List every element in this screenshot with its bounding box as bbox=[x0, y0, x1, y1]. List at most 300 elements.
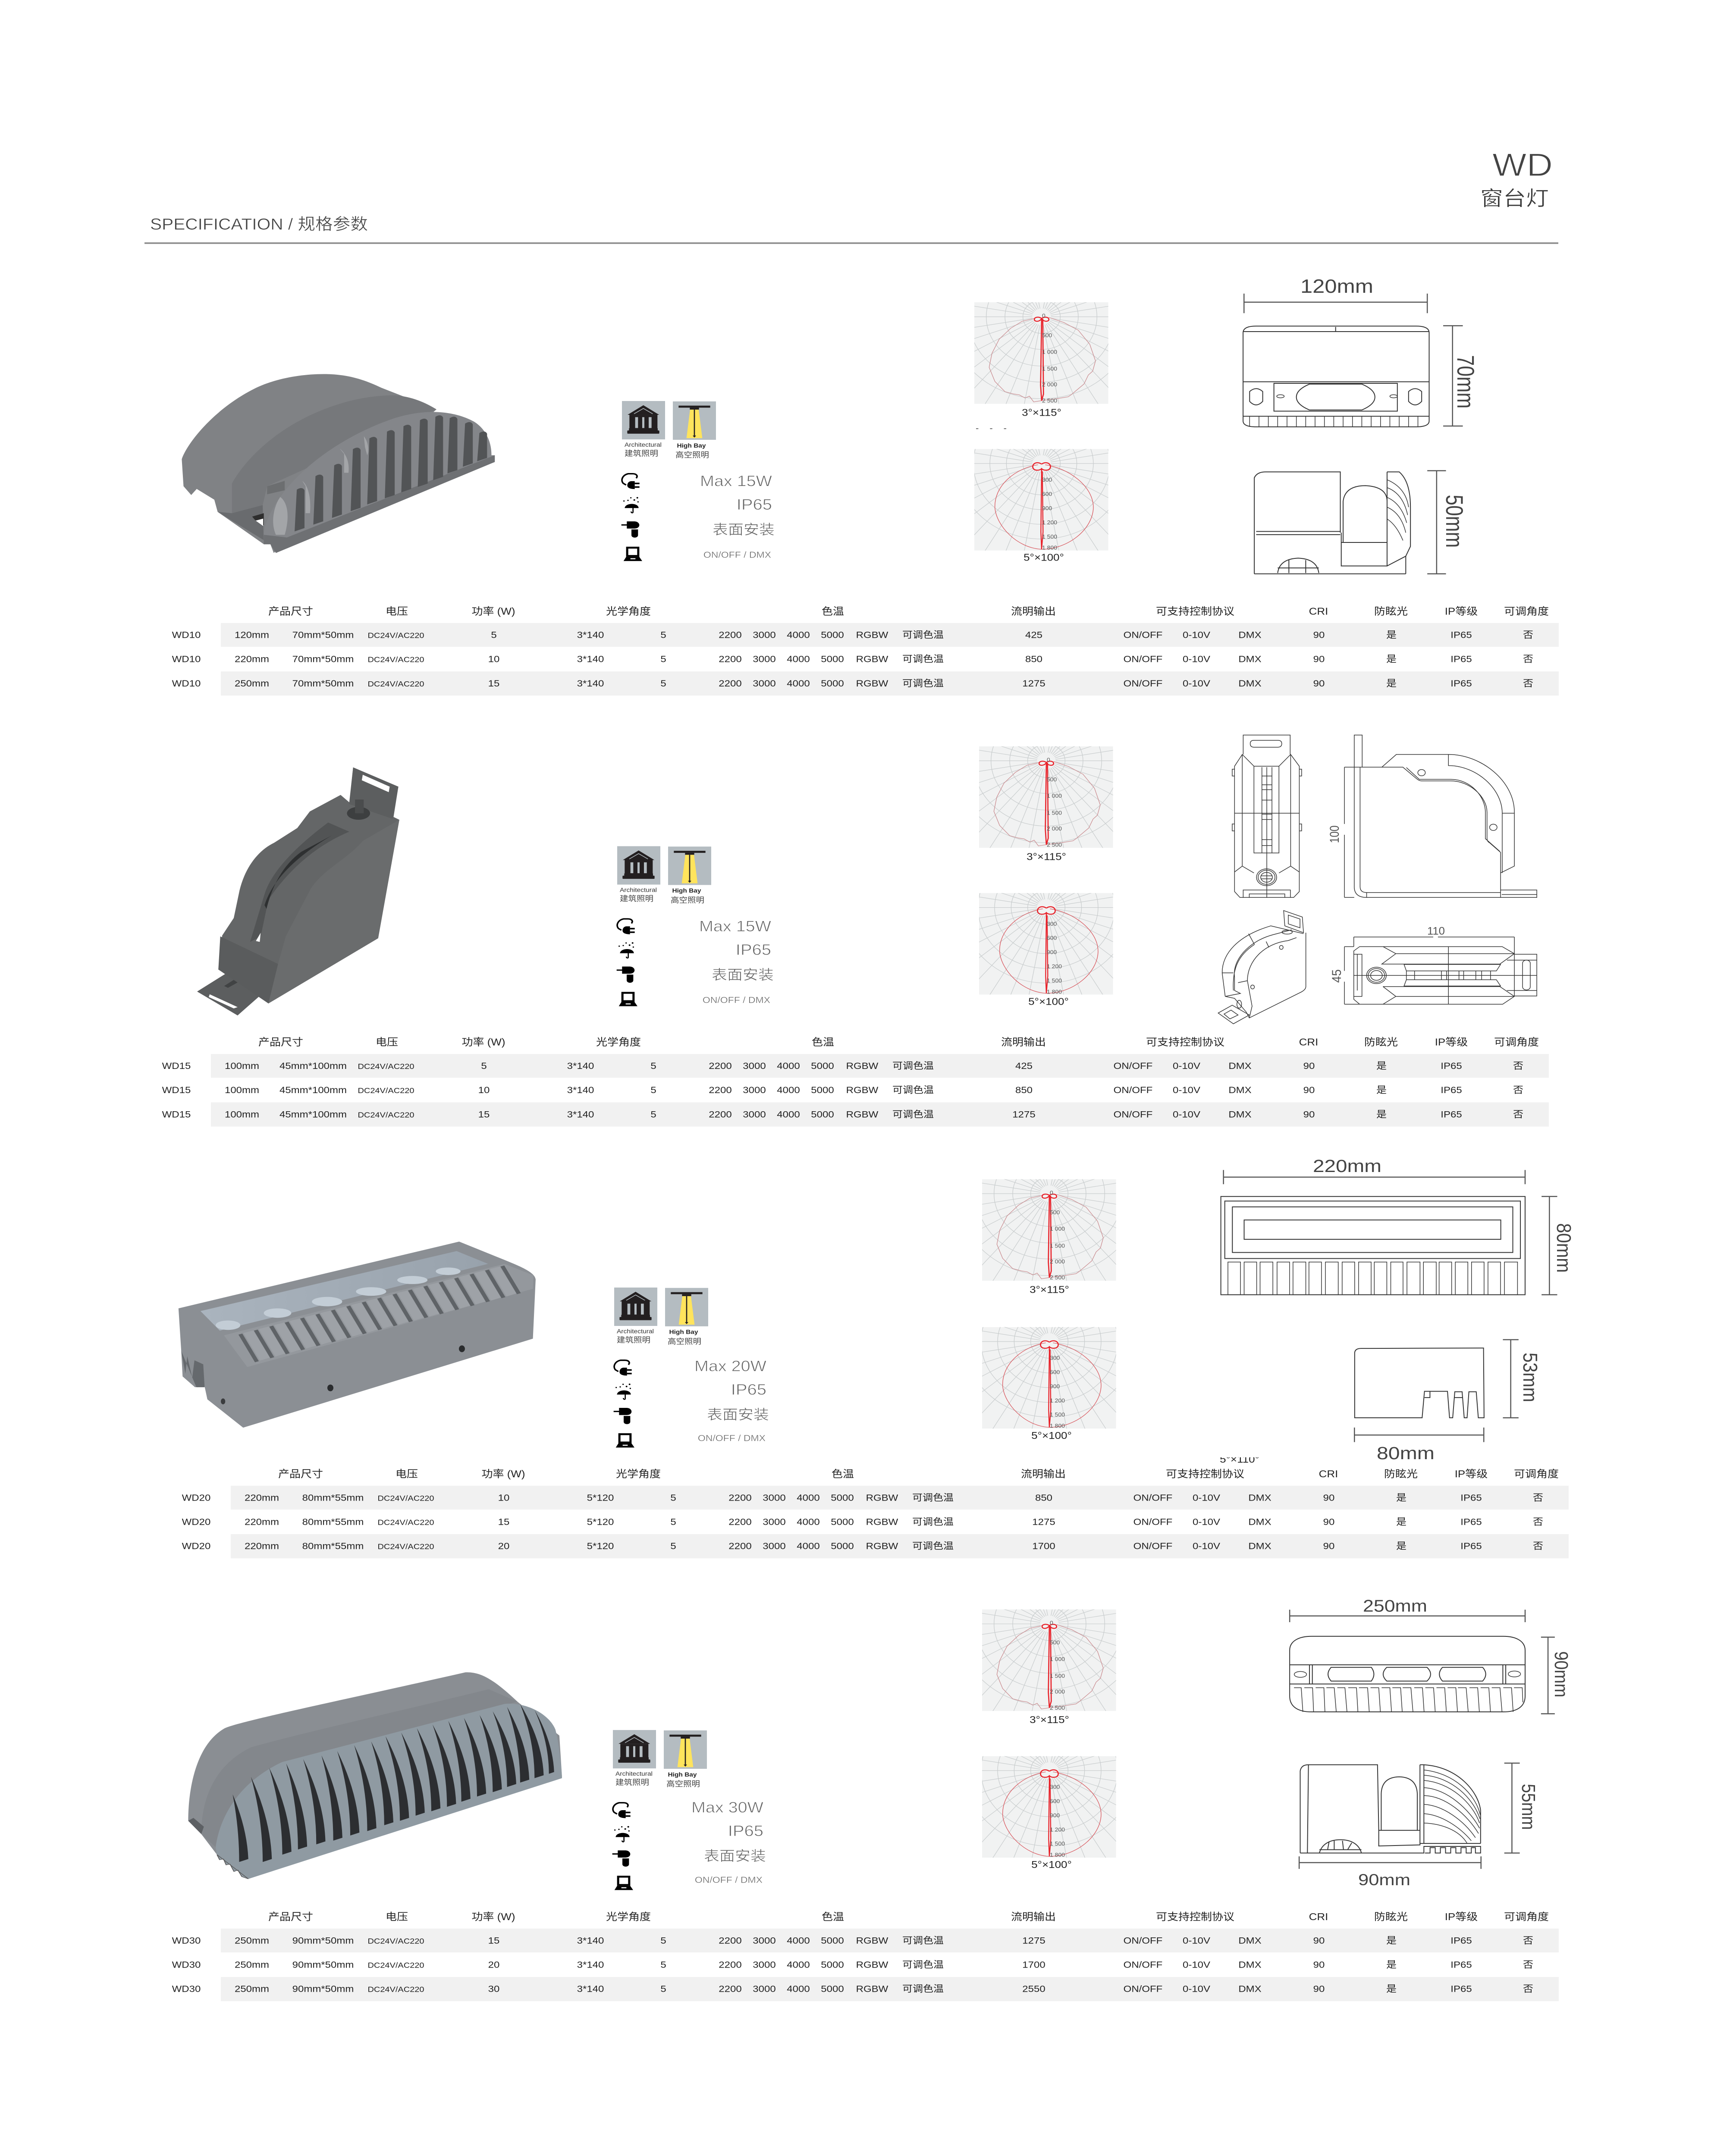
row: IP65 bbox=[1460, 1541, 1482, 1551]
table header: 功率 (W) bbox=[471, 1911, 515, 1923]
row: 4000 bbox=[787, 1984, 810, 1994]
row: 4000 bbox=[777, 1109, 800, 1119]
row: WD15 bbox=[162, 1084, 191, 1095]
table header: 流明输出 bbox=[1011, 606, 1056, 617]
row: RGBW bbox=[846, 1109, 879, 1119]
row: 250mm bbox=[235, 678, 269, 689]
row: WD10 bbox=[172, 654, 201, 664]
row: 可调色温 bbox=[902, 654, 944, 664]
row: DC24V/AC220 bbox=[367, 656, 424, 664]
row: 3000 bbox=[753, 1984, 776, 1994]
row: DMX bbox=[1238, 1984, 1262, 1994]
light chart 5×100: 600 bbox=[1047, 935, 1057, 941]
table header: 电压 bbox=[396, 1468, 418, 1480]
row: 0-10V bbox=[1193, 1492, 1221, 1503]
row: 3000 bbox=[743, 1060, 766, 1071]
table header: 可调角度 bbox=[1514, 1468, 1559, 1480]
row: 是 bbox=[1376, 1060, 1387, 1071]
use labels: Architectural bbox=[620, 887, 657, 893]
row: 10 bbox=[488, 654, 499, 664]
table header: 电压 bbox=[386, 606, 408, 617]
light chart 5×100: 1 500 bbox=[1047, 978, 1062, 984]
use labels: High Bay bbox=[672, 888, 701, 894]
row: 5*120 bbox=[587, 1517, 614, 1527]
row: 425 bbox=[1015, 1060, 1033, 1071]
light chart 5×100 bbox=[905, 781, 1188, 1034]
row: 850 bbox=[1015, 1084, 1033, 1095]
row: 5000 bbox=[821, 1984, 844, 1994]
row: 10 bbox=[498, 1492, 509, 1503]
table header: IP等级 bbox=[1445, 1911, 1478, 1923]
row: 0-10V bbox=[1193, 1517, 1221, 1527]
row: 5*120 bbox=[587, 1492, 614, 1503]
row: ON/OFF bbox=[1114, 1109, 1152, 1119]
row: 2200 bbox=[709, 1084, 732, 1095]
row: 4000 bbox=[787, 678, 810, 689]
table header: 功率 (W) bbox=[481, 1468, 525, 1480]
specs text: 表面安装 bbox=[712, 967, 774, 983]
table header: IP等级 bbox=[1445, 606, 1478, 617]
table header: 防眩光 bbox=[1384, 1468, 1418, 1480]
light chart 3×115: 3°×115° bbox=[1027, 852, 1066, 862]
row: RGBW bbox=[846, 1084, 879, 1095]
table header: 光学角度 bbox=[606, 1911, 651, 1923]
row: 可调色温 bbox=[912, 1541, 954, 1551]
side view bbox=[1344, 735, 1537, 897]
light chart 3×115: 0 bbox=[1047, 757, 1050, 763]
specs text bbox=[691, 1799, 766, 1885]
specs text: IP65 bbox=[737, 496, 772, 514]
dimension drawing: WD15 bbox=[1218, 735, 1537, 1024]
row: DMX bbox=[1238, 654, 1262, 664]
row: RGBW bbox=[866, 1517, 898, 1527]
row: 否 bbox=[1523, 1935, 1533, 1946]
row: 5 bbox=[491, 630, 497, 640]
dimension labels: 220mm bbox=[1313, 1156, 1381, 1176]
table header: 流明输出 bbox=[1021, 1468, 1066, 1480]
table header: 光学角度 bbox=[596, 1037, 641, 1048]
row: 是 bbox=[1396, 1492, 1406, 1503]
row: 3*140 bbox=[577, 678, 604, 689]
light chart 3×115: 1 500 bbox=[1050, 1673, 1065, 1679]
table header: 色温 bbox=[812, 1037, 834, 1048]
row: IP65 bbox=[1450, 1984, 1472, 1994]
row: 5000 bbox=[811, 1060, 834, 1071]
row: DMX bbox=[1228, 1060, 1252, 1071]
light chart 3×115 bbox=[905, 635, 1188, 887]
row: 5 bbox=[660, 678, 666, 689]
light chart 5×100: 1 800 bbox=[1042, 545, 1057, 551]
dimension labels: 250mm bbox=[1363, 1596, 1427, 1615]
row: 2200 bbox=[719, 654, 742, 664]
row: 0-10V bbox=[1173, 1060, 1201, 1071]
row: 5 bbox=[650, 1084, 656, 1095]
row: 0-10V bbox=[1183, 1935, 1211, 1946]
light chart 5×100: 5°×100° bbox=[1028, 997, 1069, 1007]
row: 100mm bbox=[225, 1109, 259, 1119]
dimension labels: 80mm bbox=[1552, 1223, 1574, 1273]
row: 3000 bbox=[753, 654, 776, 664]
dimension labels: 90mm bbox=[1551, 1651, 1572, 1697]
light chart 3×115: 2 000 bbox=[1050, 1689, 1065, 1695]
table header: IP等级 bbox=[1435, 1037, 1468, 1048]
row: DC24V/AC220 bbox=[367, 1986, 424, 1994]
light chart 3×115: 2 500 bbox=[1047, 842, 1062, 848]
light chart 3×115: 1 000 bbox=[1047, 793, 1062, 799]
row: 2550 bbox=[1022, 1984, 1045, 1994]
spec table: WD15 bbox=[162, 1037, 1549, 1127]
row: 3000 bbox=[763, 1517, 786, 1527]
specs text: IP65 bbox=[728, 1823, 763, 1839]
row: 220mm bbox=[245, 1541, 279, 1551]
use labels bbox=[620, 887, 704, 904]
specs text: 表面安装 bbox=[707, 1407, 769, 1423]
row: WD30 bbox=[172, 1959, 201, 1970]
row: RGBW bbox=[866, 1492, 898, 1503]
table header: 光学角度 bbox=[606, 606, 651, 617]
row: 90 bbox=[1303, 1060, 1315, 1071]
dimension labels bbox=[1358, 1596, 1572, 1889]
row: 10 bbox=[478, 1084, 490, 1095]
row: DMX bbox=[1228, 1109, 1252, 1119]
row: IP65 bbox=[1441, 1060, 1462, 1071]
specs text: IP65 bbox=[731, 1381, 766, 1398]
row: 90 bbox=[1303, 1084, 1315, 1095]
subtitle: 窗台灯: 窗台灯 bbox=[1480, 187, 1549, 210]
row: 90 bbox=[1313, 630, 1325, 640]
dimension drawing: WD20 bbox=[1221, 1156, 1574, 1463]
row: 2200 bbox=[709, 1109, 732, 1119]
row: IP65 bbox=[1441, 1084, 1462, 1095]
row: 45mm*100mm bbox=[279, 1084, 347, 1095]
row: 3000 bbox=[753, 1959, 776, 1970]
row: 3*140 bbox=[577, 654, 604, 664]
row: ON/OFF bbox=[1124, 654, 1162, 664]
specs text: Max 15W bbox=[699, 918, 771, 935]
table header: 可支持控制协议 bbox=[1146, 1037, 1224, 1048]
row: 5 bbox=[670, 1517, 676, 1527]
row: 3*140 bbox=[567, 1109, 594, 1119]
row: 90 bbox=[1323, 1517, 1334, 1527]
row: 否 bbox=[1523, 630, 1533, 640]
row: 1275 bbox=[1022, 1935, 1045, 1946]
row: 3*140 bbox=[577, 630, 604, 640]
row: 5000 bbox=[821, 654, 844, 664]
dimension labels: 55mm bbox=[1518, 1784, 1539, 1830]
spec table: WD20 bbox=[182, 1468, 1569, 1558]
row: 90mm*50mm bbox=[292, 1984, 354, 1994]
row: 90mm*50mm bbox=[292, 1959, 354, 1970]
row: 0-10V bbox=[1183, 630, 1211, 640]
use labels: Architectural bbox=[625, 442, 662, 448]
use labels bbox=[625, 442, 709, 459]
row: 可调色温 bbox=[892, 1109, 934, 1119]
row: 220mm bbox=[245, 1492, 279, 1503]
row: 120mm bbox=[235, 630, 269, 640]
light chart 3×115 bbox=[900, 191, 1183, 443]
row: 90 bbox=[1323, 1492, 1334, 1503]
row: WD10 bbox=[172, 630, 201, 640]
light chart 3×115: 3°×115° bbox=[1030, 1714, 1069, 1726]
row: DMX bbox=[1238, 1959, 1262, 1970]
row: 5000 bbox=[821, 1959, 844, 1970]
row: WD15 bbox=[162, 1109, 191, 1119]
row: 80mm*55mm bbox=[302, 1517, 364, 1527]
row: 5000 bbox=[831, 1492, 854, 1503]
light chart 3×115: 1 500 bbox=[1042, 366, 1057, 372]
row: 3*140 bbox=[577, 1935, 604, 1946]
specs text: Max 20W bbox=[694, 1358, 766, 1375]
row: DC24V/AC220 bbox=[367, 1961, 424, 1970]
table header: 电压 bbox=[386, 1911, 408, 1923]
row: DMX bbox=[1238, 1935, 1262, 1946]
use labels: High Bay bbox=[669, 1329, 698, 1335]
row: 3*140 bbox=[567, 1060, 594, 1071]
row: 4000 bbox=[777, 1084, 800, 1095]
specs text: Max 30W bbox=[691, 1799, 763, 1816]
dimension labels: 100 bbox=[1328, 825, 1342, 843]
light chart 3×115: 2 500 bbox=[1050, 1705, 1065, 1711]
light chart 5×100: 300 bbox=[1047, 921, 1057, 927]
row: WD20 bbox=[182, 1517, 210, 1527]
light chart 5×100: 900 bbox=[1042, 505, 1052, 511]
row: 可调色温 bbox=[892, 1060, 934, 1071]
product photo: WD30 bbox=[188, 1672, 562, 1879]
light chart 3×115: 1 000 bbox=[1050, 1226, 1065, 1232]
row: DMX bbox=[1248, 1517, 1271, 1527]
section: WD10 bbox=[172, 191, 1559, 696]
row: 90 bbox=[1313, 678, 1325, 689]
row: 是 bbox=[1386, 1959, 1397, 1970]
row: 可调色温 bbox=[892, 1084, 934, 1095]
row: 70mm*50mm bbox=[292, 630, 354, 640]
row: 1700 bbox=[1032, 1541, 1055, 1551]
row: IP65 bbox=[1460, 1517, 1482, 1527]
light chart 3×115: 2 000 bbox=[1050, 1259, 1065, 1265]
table header: 可调角度 bbox=[1504, 606, 1549, 617]
row: 0-10V bbox=[1183, 678, 1211, 689]
row: 2200 bbox=[719, 678, 742, 689]
row: 4000 bbox=[797, 1492, 820, 1503]
row: RGBW bbox=[856, 1935, 888, 1946]
row: 3*140 bbox=[577, 1959, 604, 1970]
light chart 5×100: 900 bbox=[1050, 1383, 1060, 1389]
row: 是 bbox=[1386, 1935, 1397, 1946]
row: 5000 bbox=[831, 1517, 854, 1527]
row: 850 bbox=[1025, 654, 1042, 664]
row: IP65 bbox=[1450, 1935, 1472, 1946]
light chart 3×115: 1 500 bbox=[1050, 1243, 1065, 1249]
table header: 色温 bbox=[822, 606, 844, 617]
row: 3*140 bbox=[567, 1084, 594, 1095]
top view bbox=[1344, 937, 1537, 1004]
specs text: 表面安装 bbox=[713, 522, 775, 538]
light chart 3×115: 1 000 bbox=[1050, 1656, 1065, 1662]
row: 可调色温 bbox=[902, 1935, 944, 1946]
row: DC24V/AC220 bbox=[367, 1937, 424, 1946]
spec table: WD30 bbox=[172, 1911, 1559, 2001]
row: RGBW bbox=[856, 654, 888, 664]
table header: CRI bbox=[1319, 1469, 1338, 1480]
row: 2200 bbox=[719, 630, 742, 640]
table header: 色温 bbox=[822, 1911, 844, 1923]
row: 100mm bbox=[225, 1084, 259, 1095]
light chart 5×100: 1 200 bbox=[1050, 1398, 1065, 1404]
row: 5000 bbox=[811, 1109, 834, 1119]
dimension drawing: WD10 bbox=[1243, 276, 1479, 574]
table header: 功率 (W) bbox=[471, 606, 515, 617]
row: IP65 bbox=[1450, 654, 1472, 664]
row: IP65 bbox=[1450, 1959, 1472, 1970]
row: 2200 bbox=[728, 1517, 752, 1527]
dimension labels: 120mm bbox=[1300, 276, 1373, 297]
row: 可调色温 bbox=[912, 1517, 954, 1527]
dimension labels: 50mm bbox=[1441, 495, 1468, 548]
row: DC24V/AC220 bbox=[377, 1494, 434, 1503]
table header: 产品尺寸 bbox=[278, 1468, 323, 1480]
light chart 5×100: 300 bbox=[1042, 477, 1052, 483]
light chart 3×115: 1 000 bbox=[1042, 349, 1057, 355]
row: 5 bbox=[481, 1060, 487, 1071]
row: 80mm*55mm bbox=[302, 1541, 364, 1551]
dimension labels: 53mm bbox=[1519, 1353, 1541, 1402]
row: RGBW bbox=[856, 1984, 888, 1994]
dimension labels: 45 bbox=[1330, 969, 1344, 983]
row: WD20 bbox=[182, 1492, 210, 1503]
table header: 防眩光 bbox=[1374, 606, 1408, 617]
row: 20 bbox=[498, 1541, 509, 1551]
light chart 3×115: 2 500 bbox=[1050, 1275, 1065, 1281]
row: 4000 bbox=[787, 1935, 810, 1946]
row: 1275 bbox=[1022, 678, 1045, 689]
row: 是 bbox=[1386, 630, 1397, 640]
row: 90 bbox=[1313, 654, 1325, 664]
row: 5*120 bbox=[587, 1541, 614, 1551]
row: DMX bbox=[1238, 678, 1262, 689]
light chart 3×115: 3°×115° bbox=[1022, 407, 1061, 418]
light chart 5×100: 900 bbox=[1047, 949, 1057, 956]
row: DC24V/AC220 bbox=[367, 632, 424, 640]
light chart 5×100: 5°×100° bbox=[1031, 1859, 1072, 1871]
table header: 防眩光 bbox=[1374, 1911, 1408, 1923]
row: 是 bbox=[1376, 1084, 1387, 1095]
light chart 3×115: 1 500 bbox=[1047, 810, 1062, 816]
row: ON/OFF bbox=[1114, 1084, 1152, 1095]
stray dashes: - - - bbox=[976, 424, 1007, 433]
light chart 3×115: 500 bbox=[1050, 1209, 1060, 1216]
table header: 可调角度 bbox=[1494, 1037, 1539, 1048]
row: 90 bbox=[1313, 1984, 1325, 1994]
row: 3000 bbox=[753, 678, 776, 689]
row: 90mm*50mm bbox=[292, 1935, 354, 1946]
section: WD30 bbox=[172, 1498, 1572, 2001]
row: 2200 bbox=[709, 1060, 732, 1071]
row: 3000 bbox=[763, 1541, 786, 1551]
use labels: Architectural bbox=[617, 1329, 654, 1335]
table header: CRI bbox=[1299, 1037, 1318, 1048]
row: 是 bbox=[1386, 1984, 1397, 1994]
row: ON/OFF bbox=[1124, 1935, 1162, 1946]
use labels: 高空照明 bbox=[675, 451, 709, 459]
use labels: Architectural bbox=[615, 1771, 653, 1777]
row: RGBW bbox=[846, 1060, 879, 1071]
row: 1275 bbox=[1032, 1517, 1055, 1527]
row: 15 bbox=[488, 678, 499, 689]
row: 425 bbox=[1025, 630, 1042, 640]
table header: 电压 bbox=[376, 1037, 398, 1048]
light chart 3×115 bbox=[908, 1498, 1191, 1750]
row: IP65 bbox=[1460, 1492, 1482, 1503]
row: 5 bbox=[660, 1984, 666, 1994]
row: 2200 bbox=[719, 1935, 742, 1946]
table header: 产品尺寸 bbox=[258, 1037, 303, 1048]
row: 5000 bbox=[821, 1935, 844, 1946]
table header: 可支持控制协议 bbox=[1166, 1468, 1244, 1480]
row: ON/OFF bbox=[1133, 1517, 1172, 1527]
row: ON/OFF bbox=[1133, 1541, 1172, 1551]
light chart 5×100: 1 800 bbox=[1050, 1423, 1065, 1429]
row: 否 bbox=[1523, 1984, 1533, 1994]
row: 3*140 bbox=[577, 1984, 604, 1994]
row: 0-10V bbox=[1183, 1959, 1211, 1970]
row: 可调色温 bbox=[902, 630, 944, 640]
row: 4000 bbox=[787, 630, 810, 640]
light chart 5×100: 600 bbox=[1050, 1369, 1060, 1375]
spec icons bbox=[614, 1288, 708, 1448]
row: 4000 bbox=[797, 1517, 820, 1527]
light chart 5×100: 1 200 bbox=[1047, 963, 1062, 970]
table header: 色温 bbox=[832, 1468, 854, 1480]
row: RGBW bbox=[856, 678, 888, 689]
row: 是 bbox=[1396, 1517, 1406, 1527]
row: DC24V/AC220 bbox=[377, 1518, 434, 1527]
table header: 产品尺寸 bbox=[268, 606, 313, 617]
row: 2200 bbox=[728, 1541, 752, 1551]
row: DMX bbox=[1248, 1492, 1271, 1503]
use labels: 高空照明 bbox=[671, 896, 704, 904]
light chart 3×115: 0 bbox=[1050, 1620, 1053, 1626]
row: 5 bbox=[660, 1935, 666, 1946]
light chart 5×100 bbox=[908, 1216, 1191, 1468]
row: 15 bbox=[478, 1109, 490, 1119]
row: 5000 bbox=[811, 1084, 834, 1095]
row: WD15 bbox=[162, 1060, 191, 1071]
row: 否 bbox=[1513, 1109, 1523, 1119]
light chart 5×100: 600 bbox=[1042, 491, 1052, 497]
table header: IP等级 bbox=[1455, 1468, 1488, 1480]
light chart 5×100: 1 800 bbox=[1047, 989, 1062, 995]
row: 70mm*50mm bbox=[292, 654, 354, 664]
row: 否 bbox=[1533, 1492, 1543, 1503]
row: RGBW bbox=[866, 1541, 898, 1551]
row: ON/OFF bbox=[1124, 1959, 1162, 1970]
row: 250mm bbox=[235, 1935, 269, 1946]
clipped label: 5°×110° bbox=[1220, 1454, 1259, 1465]
row: 否 bbox=[1513, 1084, 1523, 1095]
row: 90 bbox=[1323, 1541, 1334, 1551]
row: 5 bbox=[660, 654, 666, 664]
use labels bbox=[615, 1771, 700, 1788]
table header: CRI bbox=[1309, 606, 1328, 617]
row: 45mm*100mm bbox=[279, 1060, 347, 1071]
light chart 3×115: 500 bbox=[1042, 332, 1052, 338]
row: 可调色温 bbox=[902, 678, 944, 689]
specs text bbox=[699, 918, 774, 1005]
row: 0-10V bbox=[1173, 1109, 1201, 1119]
light chart 5×100: 900 bbox=[1050, 1812, 1060, 1818]
row: 是 bbox=[1376, 1109, 1387, 1119]
row: ON/OFF bbox=[1124, 630, 1162, 640]
